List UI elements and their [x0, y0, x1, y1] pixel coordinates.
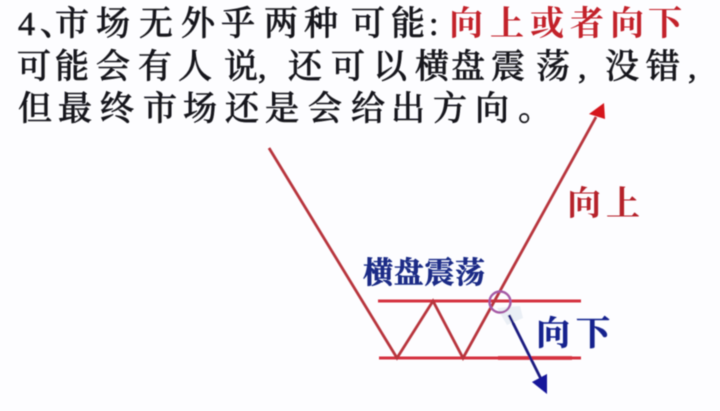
label: range: 横盘震荡	[363, 257, 485, 290]
chart: consolidation then breakout	[269, 103, 605, 394]
bottom line thick portion	[498, 356, 572, 360]
line 2: 可能会有人说,还可以横盘震荡,没错,	[17, 48, 696, 86]
range bottom line	[379, 356, 581, 360]
range top line	[378, 300, 581, 302]
label: down: 向下	[536, 315, 611, 353]
down arrow shaft	[509, 315, 541, 379]
line 1: red emphasis: 向上或者向下	[449, 5, 683, 43]
breakout circle	[490, 292, 510, 312]
pale highlight by breakout	[497, 306, 523, 325]
up arrow head	[589, 103, 605, 119]
line 1: black heading: 4、市场无外乎两种可能:	[18, 5, 438, 43]
line 3: 但最终市场还是会给出方向。	[18, 90, 552, 128]
down arrow head	[532, 374, 547, 394]
label: up: 向上	[567, 185, 640, 223]
price path	[269, 117, 596, 358]
heading text block	[17, 5, 696, 128]
